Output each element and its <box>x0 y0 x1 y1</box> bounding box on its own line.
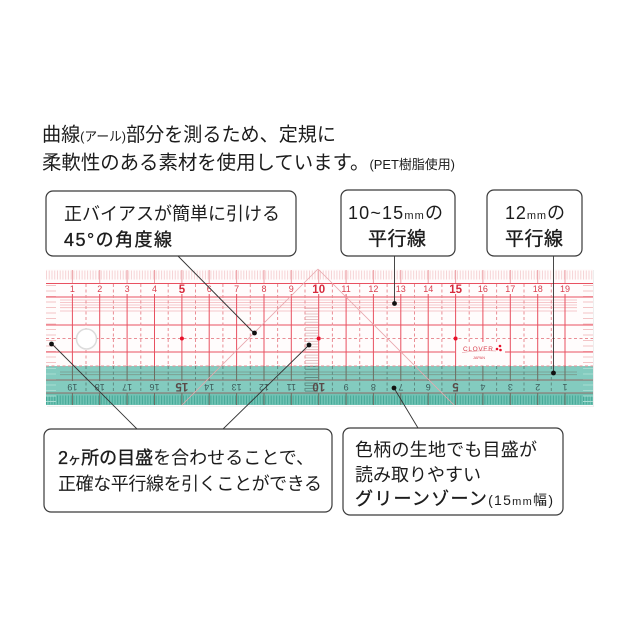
inverted numbers: 12 <box>259 382 269 392</box>
inverted numbers <box>67 380 568 392</box>
horizontal grid lines <box>46 284 593 393</box>
top numbers: 15 <box>449 284 463 296</box>
inverted numbers: 18 <box>95 382 105 392</box>
top numbers: 16 <box>478 284 488 294</box>
callout: green zone: 読み取りやすい <box>355 465 481 485</box>
45 degree lines <box>182 269 454 405</box>
top numbers: 14 <box>423 284 433 294</box>
top numbers <box>70 284 570 296</box>
top numbers: 17 <box>505 284 515 294</box>
inverted numbers: 11 <box>287 382 296 392</box>
top numbers: 8 <box>261 284 267 294</box>
leader line: green zone <box>392 386 418 428</box>
inverted numbers: 13 <box>232 382 242 392</box>
inverted numbers: 14 <box>204 382 214 392</box>
inverted numbers: 7 <box>398 382 403 392</box>
top numbers: 4 <box>152 284 157 294</box>
leader line: left scale <box>49 342 138 430</box>
leader line: centre scale <box>222 343 311 430</box>
green zone <box>46 366 593 405</box>
clover logo <box>462 345 502 360</box>
inverted numbers: 4 <box>480 382 485 392</box>
callout: 12mm: 平行線 <box>505 228 563 250</box>
fine parallel lines <box>60 300 577 375</box>
callout: two scales: 2ヶ所の目盛を合わせることで、 <box>58 448 314 468</box>
callout: 10-15mm: 10~15mmの <box>348 203 443 223</box>
top numbers: 2 <box>97 284 102 294</box>
top numbers: 13 <box>396 284 406 294</box>
top numbers: 18 <box>533 284 543 294</box>
top numbers: 19 <box>560 284 570 294</box>
inverted numbers: 19 <box>67 382 77 392</box>
callout: 10-15mm <box>341 190 455 256</box>
top numbers: 7 <box>234 284 239 294</box>
inverted numbers: 8 <box>371 382 376 392</box>
callout: two scales <box>44 429 332 512</box>
leader line: 45 degree <box>178 256 257 335</box>
callout: 12mm <box>487 190 582 256</box>
top numbers: 6 <box>207 284 212 294</box>
callout: two scales: 正確な平行線を引くことができる <box>58 474 322 494</box>
top numbers: 9 <box>289 284 294 294</box>
clover logo: CLOVER <box>463 346 493 353</box>
ruler <box>46 269 594 407</box>
callout: 45 degree: 45°の角度線 <box>64 230 172 250</box>
callout: 10-15mm: 平行線 <box>368 228 426 250</box>
heading: 曲線(アール)部分を測るため、定規に <box>42 124 336 146</box>
inverted numbers: 10 <box>312 380 325 392</box>
callout: 12mm: 12mmの <box>505 203 565 223</box>
top numbers: 11 <box>341 284 351 294</box>
inverted numbers: 3 <box>508 382 513 392</box>
inverted numbers: 1 <box>562 382 568 392</box>
inverted numbers: 2 <box>535 382 540 392</box>
heading <box>42 124 455 174</box>
inverted numbers: 6 <box>426 382 431 392</box>
top numbers: 1 <box>70 284 75 294</box>
callout: 45 degree: 正バイアスが簡単に引ける <box>64 204 280 224</box>
leader line: 10-15mm <box>392 256 397 306</box>
callout: green zone: グリーンゾーン(15mm幅) <box>355 489 553 509</box>
inverted numbers: 17 <box>122 382 132 392</box>
heading: 柔軟性のある素材を使用しています。(PET樹脂使用) <box>42 152 455 174</box>
callout: green zone: 色柄の生地でも目盛が <box>355 440 537 460</box>
inverted numbers: 16 <box>149 382 160 392</box>
leader line: 12mm <box>551 256 556 375</box>
top numbers: 3 <box>125 284 130 294</box>
top numbers: 5 <box>179 284 186 296</box>
red centre marks <box>180 336 458 340</box>
callout: 45 degree <box>46 191 296 256</box>
top numbers: 12 <box>368 284 378 294</box>
top numbers: 10 <box>312 284 325 296</box>
hanging hole <box>76 329 96 349</box>
vertical grid lines <box>72 270 565 405</box>
inverted numbers: 5 <box>452 380 459 392</box>
scale ticks <box>46 275 593 405</box>
clover logo: JAPAN <box>473 356 485 360</box>
callout: green zone <box>343 428 563 515</box>
inverted numbers: 9 <box>344 382 349 392</box>
inverted numbers: 15 <box>175 380 188 392</box>
